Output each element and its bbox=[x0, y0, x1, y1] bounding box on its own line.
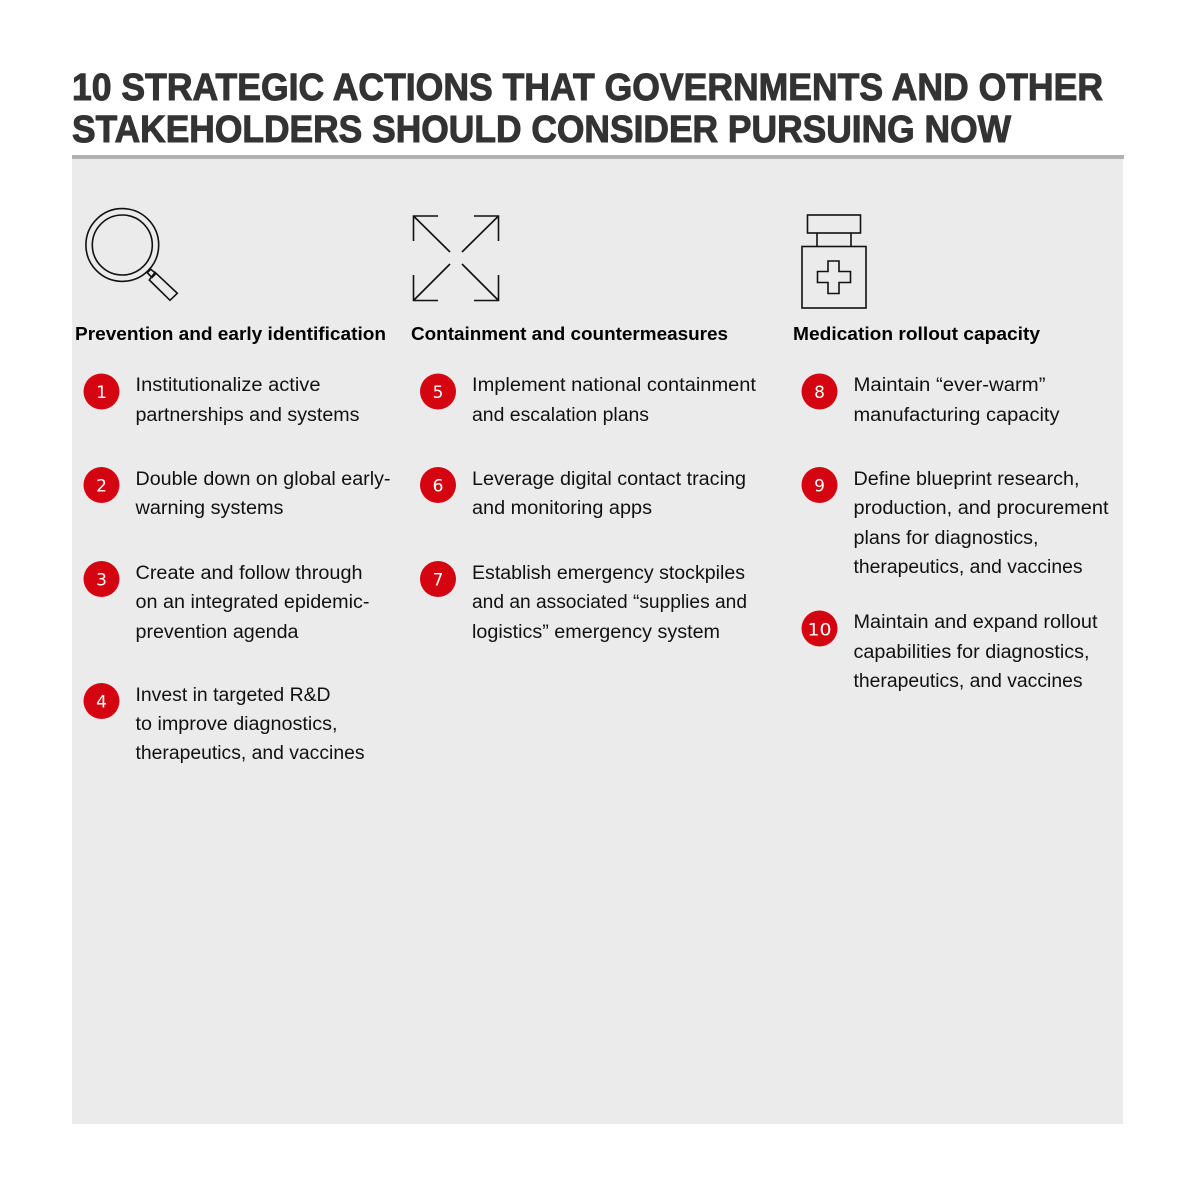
action 2: warning systems bbox=[134, 498, 284, 519]
action 10: therapeutics, and vaccines bbox=[854, 671, 1082, 692]
title: STAKEHOLDERS SHOULD CONSIDER PURSUING NOW bbox=[72, 109, 1011, 151]
action 3: prevention agenda bbox=[136, 622, 299, 643]
action 9: plans for diagnostics, bbox=[854, 528, 1038, 549]
action 1: 1 bbox=[96, 383, 107, 403]
action 9: therapeutics, and vaccines bbox=[854, 557, 1082, 578]
action 3: 3 bbox=[96, 570, 107, 590]
action 7: 7 bbox=[433, 570, 443, 590]
action 5: and escalation plans bbox=[472, 405, 649, 426]
action 2: Double down on global early- bbox=[136, 469, 390, 490]
action 5 bbox=[420, 374, 757, 426]
action 7: logistics” emergency system bbox=[472, 622, 720, 643]
action 3: on an integrated epidemic- bbox=[136, 592, 370, 613]
heading: containment: Containment and countermeasures bbox=[411, 324, 728, 344]
action 2 bbox=[84, 467, 390, 519]
action 6: Leverage digital contact tracing bbox=[472, 469, 746, 490]
action 4: to improve diagnostics, bbox=[136, 714, 338, 735]
action 10: Maintain and expand rollout bbox=[854, 612, 1098, 633]
action 4 bbox=[84, 683, 364, 764]
action 9: 9 bbox=[814, 476, 825, 496]
action 9: production, and procurement bbox=[854, 498, 1109, 519]
action 10: 10 bbox=[808, 620, 832, 640]
action 1 bbox=[84, 374, 360, 426]
action 4: Invest in targeted R&D bbox=[136, 685, 330, 706]
heading: medication: Medication rollout capacity bbox=[793, 324, 1040, 344]
action 9: Define blueprint research, bbox=[854, 469, 1080, 490]
title rule bbox=[72, 155, 1124, 159]
action 8: 8 bbox=[814, 383, 825, 403]
action 1: Institutionalize active bbox=[136, 375, 320, 396]
heading: prevention: Prevention and early identification bbox=[75, 324, 386, 344]
icon: magnifying glass bbox=[86, 209, 177, 300]
icon: medicine bottle bbox=[802, 215, 866, 308]
action 6: and monitoring apps bbox=[472, 498, 652, 519]
action 7: and an associated “supplies and bbox=[472, 592, 747, 613]
action 8: manufacturing capacity bbox=[854, 405, 1060, 426]
action 2: 2 bbox=[96, 476, 107, 496]
action 3: Create and follow through bbox=[136, 563, 362, 584]
action 9 bbox=[802, 467, 1109, 578]
action 10: capabilities for diagnostics, bbox=[854, 642, 1090, 663]
panel: background bbox=[72, 158, 1123, 1124]
action 8 bbox=[802, 374, 1060, 426]
icon: expanding arrows bbox=[414, 216, 498, 300]
action 6 bbox=[420, 467, 746, 519]
action 7: Establish emergency stockpiles bbox=[472, 563, 745, 584]
action 1: partnerships and systems bbox=[136, 405, 360, 426]
action 4: therapeutics, and vaccines bbox=[136, 743, 364, 764]
title: 10 STRATEGIC ACTIONS THAT GOVERNMENTS AND OTHER bbox=[72, 67, 1103, 109]
action 7 bbox=[420, 561, 747, 643]
action 8: Maintain “ever-warm” bbox=[854, 375, 1046, 396]
action 6: 6 bbox=[433, 476, 443, 496]
action 3 bbox=[84, 561, 370, 643]
title bbox=[72, 67, 1103, 151]
action 5: Implement national containment bbox=[472, 375, 757, 396]
action 4: 4 bbox=[96, 692, 107, 712]
action 5: 5 bbox=[433, 383, 443, 403]
action 10 bbox=[802, 610, 1098, 692]
